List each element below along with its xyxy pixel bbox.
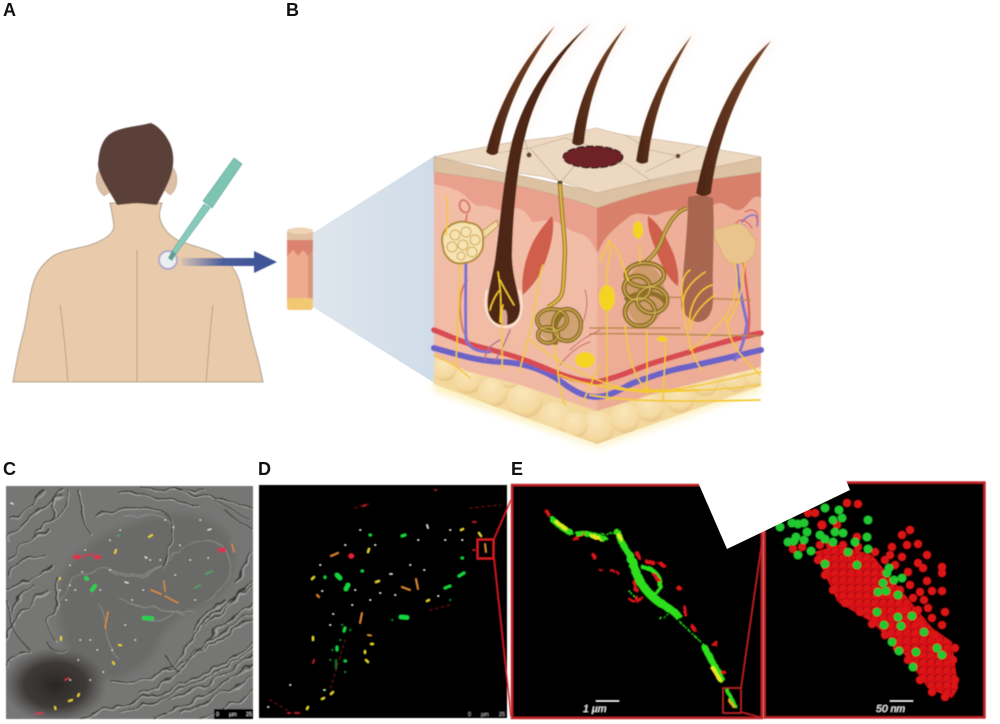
arrector pili muscle left [522, 216, 553, 295]
red signal [288, 490, 476, 713]
yellow signal [55, 535, 152, 709]
hair pores [526, 152, 680, 186]
skin surface and epidermis [434, 128, 761, 208]
yellow glow [434, 380, 761, 447]
hair shaft 1 [486, 26, 555, 155]
scale bar C: 25 [246, 712, 252, 718]
bulb glow outline [486, 290, 521, 327]
panel E label: E [511, 459, 523, 479]
right ear [164, 168, 177, 195]
panel C: overlay micrograph [3, 486, 254, 723]
orange signal [105, 544, 234, 628]
dense red cluster [815, 545, 958, 698]
sweat gland 2 [624, 208, 687, 326]
yellow signal [307, 529, 481, 709]
sparse red dots [789, 499, 959, 701]
panel D: fluorescence image [259, 485, 511, 718]
scale text D: 25 [499, 712, 505, 718]
sebaceous gland left [442, 220, 498, 264]
green signal [325, 535, 464, 690]
hair shaft 2 with bulb [488, 24, 590, 325]
inset box on D [478, 540, 494, 558]
panel A label: A [3, 0, 16, 20]
frame and black background [512, 485, 762, 718]
panel E left: STED detail [512, 485, 763, 718]
panel C label: C [3, 459, 16, 479]
biopsy punch tool [168, 158, 242, 261]
hair shaft 3 [572, 25, 627, 146]
arrow [181, 251, 277, 273]
white specks [268, 525, 462, 707]
biopsy core cylinder [287, 228, 313, 310]
zoom lines to E [494, 500, 511, 716]
frame and black background [764, 482, 984, 718]
hair shaft 5 [696, 41, 771, 196]
panel B label: B [286, 0, 299, 20]
red signal [547, 512, 724, 672]
sweat gland 1 [537, 184, 581, 345]
green structure [553, 520, 735, 706]
faint red haze [270, 503, 500, 712]
hair shaft 4 [636, 35, 692, 164]
yellow overlap [556, 522, 734, 707]
blood vessels [434, 200, 761, 397]
black background [259, 485, 507, 718]
follicle root sheath right [681, 195, 714, 322]
upper dermis right [597, 160, 761, 253]
magnification cone [313, 155, 436, 384]
left dermis [434, 160, 597, 443]
scale bar label 50 nm [876, 701, 913, 715]
biopsy site [159, 251, 177, 269]
panel D label: D [258, 459, 271, 479]
inset box on E [723, 688, 741, 713]
scale bar C: 0 [216, 712, 219, 718]
left ear [96, 170, 110, 196]
sebaceous gland right [714, 224, 756, 264]
scale text D: 0 [468, 712, 471, 718]
green dots [776, 504, 946, 671]
zoom lines to right panel [741, 535, 763, 718]
scale bar label 1 µm: 1 µm [583, 703, 607, 715]
embossed light lines [7, 488, 254, 720]
scale text D: µm [481, 712, 489, 718]
upper dermis left [434, 160, 597, 253]
panel B: skin cross-section [432, 24, 771, 447]
biopsy hole [563, 146, 623, 168]
scale bar C [214, 709, 253, 719]
scale bar C: µm [229, 712, 237, 718]
embossed dark lines [6, 487, 253, 719]
sensory corpuscles [575, 221, 667, 368]
hair glow [491, 24, 771, 220]
red signal [35, 550, 224, 714]
white flecks [11, 503, 211, 680]
scale text D [468, 712, 505, 718]
light cell outlines [60, 515, 229, 660]
scale bar label 1 µm [583, 701, 619, 715]
panel E right: single molecule dots [764, 482, 984, 718]
right dermis [597, 160, 761, 443]
orange signal [317, 544, 486, 636]
cell region [57, 513, 235, 680]
grey background [6, 486, 253, 719]
arrector pili muscle right [648, 216, 678, 286]
white mask polygon [697, 480, 850, 549]
hair [98, 123, 173, 205]
nerve fibres [435, 196, 761, 405]
torso [13, 203, 263, 382]
hair papilla [501, 310, 507, 325]
subcutaneous fat layer [432, 352, 767, 445]
dark tissue patch [7, 650, 104, 719]
spine and arm creases [60, 250, 213, 382]
green signal [86, 535, 212, 618]
scale bar label 50 nm: 50 nm [876, 703, 905, 715]
panel A: biopsy on patient back [13, 123, 277, 382]
